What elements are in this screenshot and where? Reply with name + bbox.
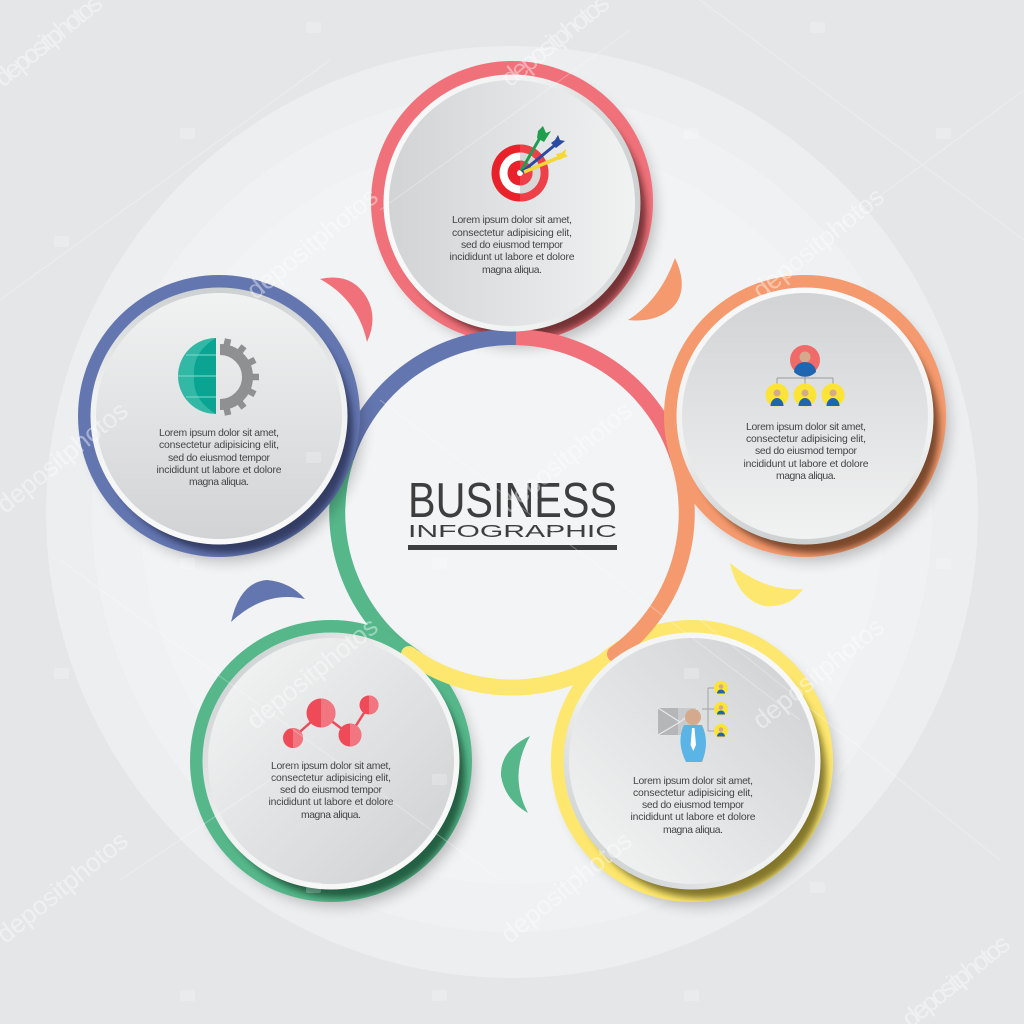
- icon: line chart dots: [283, 696, 378, 748]
- text: bottom-right panel: [630, 776, 756, 836]
- ring: top pink: [371, 61, 655, 347]
- text: right panel: consectetur adipisicing elit,: [746, 434, 866, 445]
- text: bottom-left panel: Lorem ipsum dolor sit amet,: [271, 761, 391, 772]
- text: bottom-left panel: magna aliqua.: [301, 810, 361, 821]
- text: left panel: magna aliqua.: [189, 477, 249, 488]
- title: [408, 474, 617, 550]
- watermark: depositphotos: [240, 181, 384, 305]
- text: top panel: [450, 215, 575, 276]
- panel: left: [90, 288, 348, 544]
- text: top panel: Lorem ipsum dolor sit amet,: [452, 215, 572, 226]
- ring: right orange: [664, 275, 948, 561]
- panel: bottom-left: [202, 632, 460, 890]
- text: right panel: Lorem ipsum dolor sit amet,: [746, 422, 866, 433]
- watermark: depositphotos: [494, 395, 638, 519]
- crescent: pink: [320, 278, 372, 342]
- text: top panel: consectetur adipisicing elit,: [452, 228, 572, 239]
- watermark: depositphotos: [746, 181, 890, 305]
- crescent: orange: [628, 258, 682, 320]
- ring: left blue: [78, 275, 362, 561]
- icon: org chart: [766, 345, 844, 406]
- text: right panel: magna aliqua.: [776, 471, 836, 482]
- text: bottom-right panel: sed do eiusmod tempor: [642, 800, 745, 811]
- text: bottom-right panel: magna aliqua.: [663, 825, 723, 836]
- text: right panel: [744, 422, 869, 482]
- text: left panel: incididunt ut labore et dolore: [156, 465, 282, 476]
- panel: bottom-right: [564, 632, 820, 890]
- text: right panel: incididunt ut labore et dolore: [744, 459, 869, 470]
- crescent: blue: [231, 580, 305, 622]
- central ring: orange arc: [615, 458, 687, 654]
- text: bottom-right panel: incididunt ut labore et dolore: [630, 812, 756, 823]
- ring: bottom-left green: [190, 620, 474, 906]
- text: bottom-left panel: incididunt ut labore et dolore: [268, 797, 394, 808]
- central ring: yellow arc: [409, 654, 615, 688]
- panel: right: [676, 288, 934, 544]
- text: left panel: consectetur adipisicing elit,: [159, 440, 279, 451]
- text: bottom-right panel: consectetur adipisicing elit,: [633, 788, 753, 799]
- watermark: depositphotos: [494, 825, 638, 949]
- text: bottom-left panel: consectetur adipisicing elit,: [271, 773, 391, 784]
- text: bottom-right panel: Lorem ipsum dolor sit amet,: [633, 776, 753, 787]
- text: bottom-left panel: sed do eiusmod tempor: [280, 785, 383, 796]
- central ring: pink arc: [515, 337, 678, 458]
- text: left panel: Lorem ipsum dolor sit amet,: [159, 428, 279, 439]
- icon: manager with team: [658, 681, 728, 762]
- crescent: yellow: [730, 563, 803, 606]
- text: top panel: magna aliqua.: [482, 265, 542, 276]
- text: left panel: [156, 428, 282, 488]
- text: bottom-left panel: [268, 761, 394, 821]
- panel: top: [384, 74, 640, 332]
- text: right panel: sed do eiusmod tempor: [755, 446, 858, 457]
- watermark: depositphotos: [240, 611, 384, 735]
- icon: target with darts: [492, 126, 568, 202]
- crescent: green: [501, 736, 530, 813]
- ring: bottom-right yellow: [551, 620, 835, 906]
- title: INFOGRAPHIC: [408, 521, 617, 541]
- central ring: green arc: [337, 458, 409, 654]
- title: BUSINESS: [408, 474, 617, 528]
- text: left panel: sed do eiusmod tempor: [168, 453, 271, 464]
- watermark: depositphotos: [746, 611, 890, 735]
- text: top panel: sed do eiusmod tempor: [461, 240, 564, 251]
- icon: globe and gear: [178, 338, 259, 415]
- central ring: blue arc: [346, 337, 516, 458]
- text: top panel: incididunt ut labore et dolore: [450, 252, 575, 263]
- central disc: [342, 342, 682, 682]
